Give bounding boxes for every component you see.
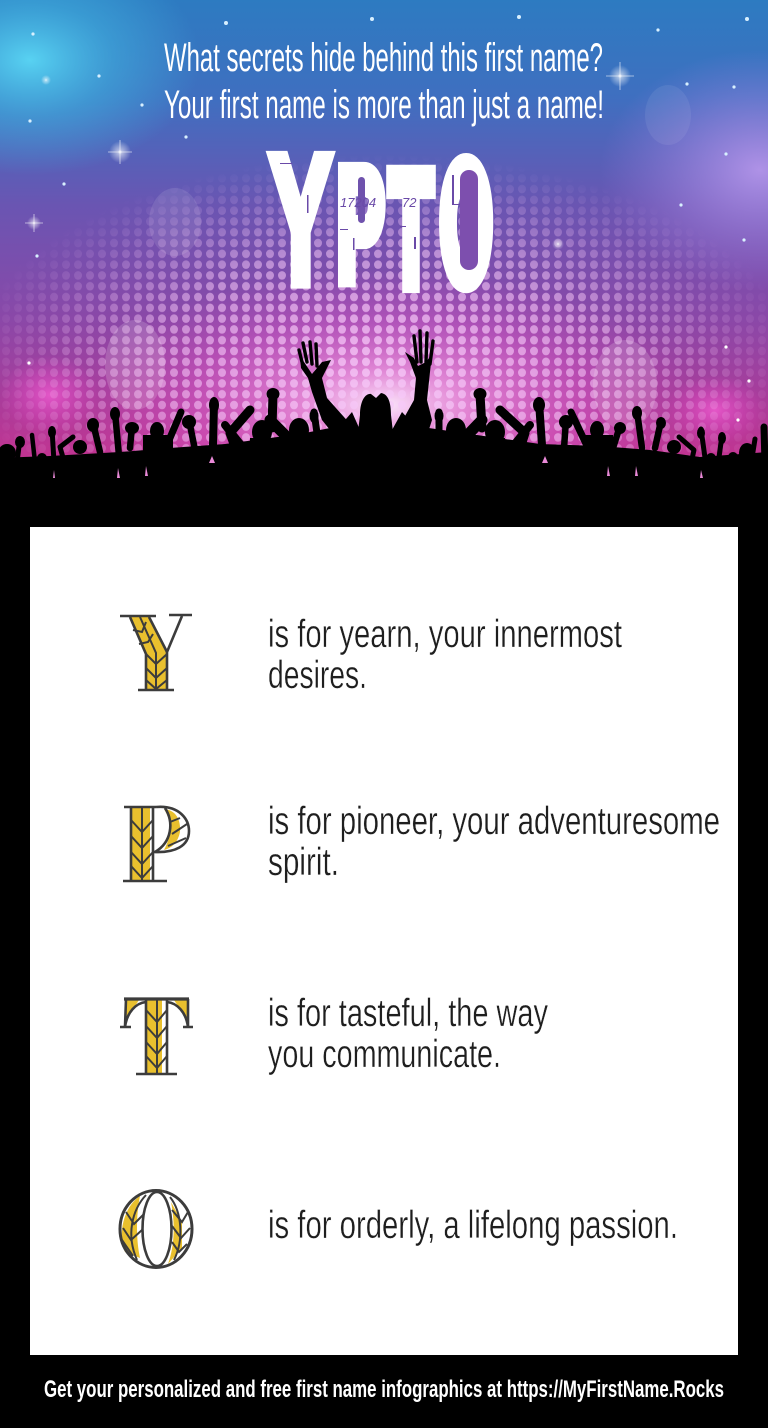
title: distressed name YPTO: O	[440, 130, 492, 318]
background stage: gradient, glows and dots	[0, 0, 768, 458]
title: distressed name YPTO: T	[389, 138, 433, 320]
text: T line: is for tasteful, the way	[268, 992, 548, 1035]
crowd silhouette	[0, 331, 768, 482]
title: distressed name YPTO	[270, 119, 492, 321]
title: distressed name YPTO: 72	[402, 195, 417, 210]
text: P line	[268, 800, 720, 884]
icon: letter O with wheat	[120, 1190, 192, 1268]
text: T line: you communicate.	[268, 1033, 501, 1076]
central figure	[0, 331, 768, 482]
title: distressed name YPTO: Y	[270, 119, 331, 321]
heading: two intro lines	[164, 36, 604, 127]
white panel	[30, 527, 738, 1355]
title: distressed name YPTO: 17204	[340, 195, 376, 210]
title: distressed name YPTO: P	[337, 136, 384, 313]
text: Y line: is for yearn, your innermost	[268, 613, 622, 656]
text: T line	[268, 992, 548, 1076]
icon: letter T with wheat	[120, 999, 193, 1074]
text: Y line: desires.	[268, 654, 367, 697]
text: P line: spirit.	[268, 841, 339, 884]
raised arms	[17, 394, 765, 468]
heads and hands	[0, 388, 755, 465]
icon: letter P with wheat	[123, 807, 189, 881]
icon: letter Y with wheat	[120, 615, 192, 690]
text: Y line	[268, 613, 622, 697]
black lower background	[0, 478, 768, 1428]
